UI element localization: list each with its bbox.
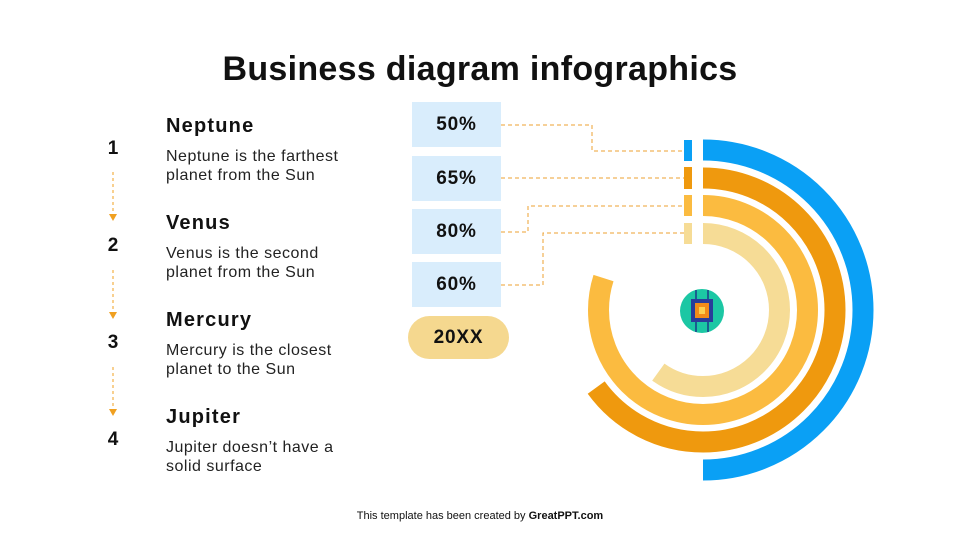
text: Mercury: Mercury is the closest bbox=[166, 342, 332, 359]
box 50%: 50% bbox=[436, 114, 477, 135]
value boxes bbox=[408, 102, 509, 359]
box 80%: 80% bbox=[436, 221, 477, 242]
step 4: 4 bbox=[108, 429, 118, 450]
text: Neptune: planet from the Sun bbox=[166, 167, 315, 184]
box 60%: 60% bbox=[436, 274, 477, 295]
icon: chip bbox=[680, 289, 724, 333]
pill 20XX: 20XX bbox=[434, 327, 483, 348]
text: Mercury: Mercury bbox=[166, 309, 252, 331]
step 1: 1 bbox=[108, 138, 118, 159]
step 3: 3 bbox=[108, 332, 118, 353]
text: Jupiter: Jupiter doesn’t have a bbox=[166, 439, 334, 456]
text: Neptune bbox=[166, 115, 338, 184]
text: Venus: Venus bbox=[166, 212, 231, 234]
text: Neptune: Neptune is the farthest bbox=[166, 148, 338, 165]
ring 80% bbox=[598, 206, 808, 414]
box 80% bbox=[412, 209, 501, 254]
text: Venus: planet from the Sun bbox=[166, 264, 315, 281]
text: Venus bbox=[166, 212, 319, 281]
text: Neptune: Neptune bbox=[166, 115, 254, 137]
box 65% bbox=[412, 156, 501, 201]
arrow 2 bbox=[109, 270, 117, 319]
text: Jupiter: Jupiter bbox=[166, 406, 241, 428]
numbered steps bbox=[108, 138, 118, 450]
ring 60% bbox=[626, 234, 780, 386]
box 50% bbox=[412, 102, 501, 147]
box 60% bbox=[412, 262, 501, 307]
text: Jupiter bbox=[166, 406, 334, 475]
arrow 3 bbox=[109, 367, 117, 416]
ring 65% bbox=[571, 178, 835, 442]
arrow 1 bbox=[109, 172, 117, 221]
text: Jupiter: solid surface bbox=[166, 458, 262, 475]
title: Business diagram infographics bbox=[222, 50, 738, 88]
ring 50% bbox=[543, 150, 863, 470]
step 2: 2 bbox=[108, 235, 118, 256]
text: Venus: Venus is the second bbox=[166, 245, 319, 262]
pill 20XX bbox=[408, 316, 509, 359]
text: Mercury bbox=[166, 309, 332, 378]
box 65%: 65% bbox=[436, 168, 477, 189]
footer: This template has been created by GreatPPT.com bbox=[357, 510, 603, 522]
text: Mercury: planet to the Sun bbox=[166, 361, 295, 378]
